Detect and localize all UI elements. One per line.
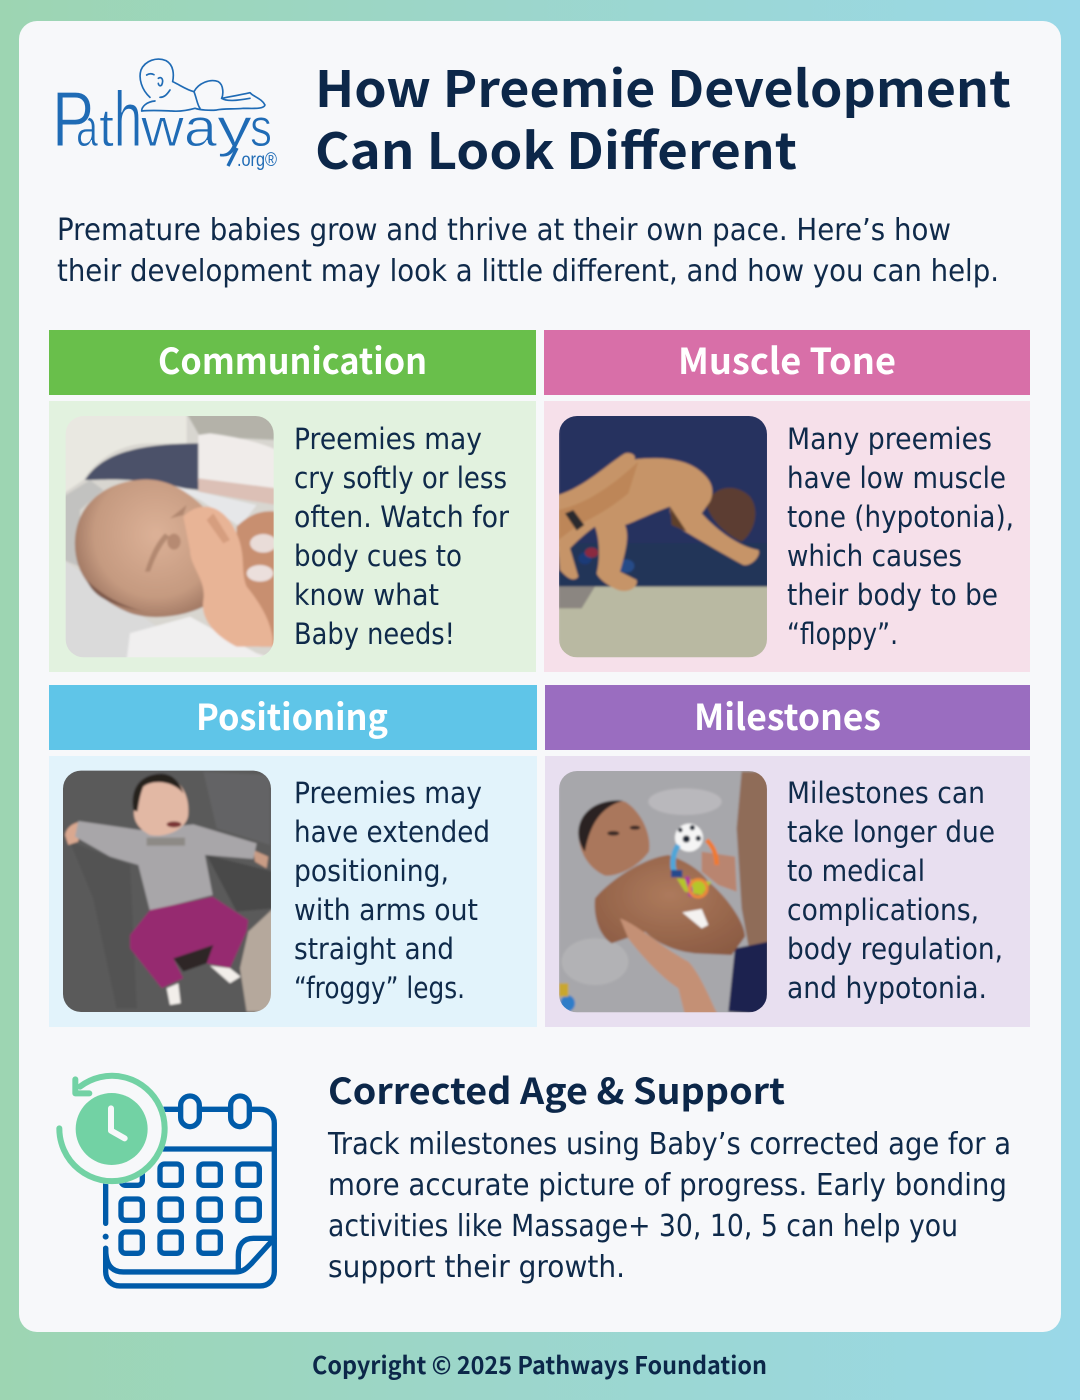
text: muscle tone bbox=[787, 422, 1014, 651]
text: communication: know what bbox=[294, 578, 439, 612]
photo: baby with toy and caregiver bbox=[558, 768, 772, 1015]
icon: calendar bbox=[106, 1096, 274, 1286]
logo: Pathways.org: a bbox=[76, 98, 99, 158]
text: communication: often. Watch for bbox=[294, 500, 509, 534]
text: positioning: with arms out bbox=[294, 893, 478, 927]
text: communication bbox=[294, 422, 509, 651]
icon: clock with return arrow bbox=[56, 1072, 168, 1184]
text: muscle tone: their body to be bbox=[787, 578, 998, 612]
title: How Preemie Development bbox=[315, 50, 1011, 122]
text: milestones: take longer due bbox=[787, 815, 995, 849]
text: communication: Baby needs! bbox=[294, 617, 455, 651]
logo: Pathways.org: wa bbox=[140, 98, 218, 158]
header: milestones: Milestones bbox=[694, 689, 881, 741]
text: muscle tone: which causes bbox=[787, 539, 962, 573]
logo: Pathways.org: .org® bbox=[237, 150, 277, 171]
text: milestones: and hypotonia. bbox=[787, 971, 987, 1005]
text: positioning: straight and bbox=[294, 932, 454, 966]
header: positioning: Positioning bbox=[196, 689, 388, 741]
icon: calendar with clock bbox=[56, 1072, 274, 1286]
header: communication: Communication bbox=[158, 333, 427, 385]
text: corrected age body: activities like Massage+ 30, 10, 5 can help you bbox=[328, 1209, 958, 1244]
text: muscle tone: tone (hypotonia), bbox=[787, 500, 1014, 534]
intro text: Premature babies grow and thrive at their own pace. Here’s how bbox=[57, 213, 951, 248]
logo: Pathways.org: P bbox=[52, 75, 94, 163]
text: corrected age body: more accurate picture of progress. Early bonding bbox=[328, 1168, 1007, 1203]
logo: Pathways.org: t bbox=[99, 98, 114, 158]
logo: Pathways.org: y bbox=[217, 98, 252, 158]
text: corrected age body: Track milestones using Baby’s corrected age for a bbox=[327, 1127, 1011, 1162]
panel: milestones bbox=[545, 685, 1030, 1027]
text: milestones bbox=[787, 776, 1003, 1005]
panel: communication bbox=[49, 330, 536, 672]
header: communication bbox=[49, 330, 536, 395]
text: positioning: Preemies may bbox=[294, 776, 482, 810]
photo: newborn crying bbox=[63, 413, 277, 660]
footer copyright: Copyright © 2025 Pathways Foundation bbox=[312, 1346, 767, 1381]
header: muscle tone: Muscle Tone bbox=[678, 333, 896, 385]
text: muscle tone: have low muscle bbox=[787, 461, 1006, 495]
photo: baby with extended arms and froggy legs bbox=[60, 768, 273, 1015]
text: positioning: “froggy” legs. bbox=[294, 971, 465, 1005]
text: milestones: body regulation, bbox=[787, 932, 1003, 966]
text: muscle tone: “floppy”. bbox=[787, 617, 898, 651]
logo: Pathways.org: s bbox=[250, 98, 272, 158]
intro text bbox=[57, 213, 999, 289]
header: milestones bbox=[545, 685, 1030, 750]
title: Can Look Different bbox=[315, 112, 797, 184]
text: milestones: to medical bbox=[787, 854, 925, 888]
logo: Pathways.org: h bbox=[114, 75, 142, 163]
photo: baby held showing low muscle tone bbox=[558, 413, 772, 660]
text: positioning: have extended bbox=[294, 815, 490, 849]
text: communication: body cues to bbox=[294, 539, 462, 573]
text: positioning bbox=[294, 776, 490, 1005]
title bbox=[315, 50, 1011, 184]
text: milestones: Milestones can bbox=[787, 776, 985, 810]
text: muscle tone: Many preemies bbox=[787, 422, 992, 456]
intro text: their development may look a little different, and how you can help. bbox=[57, 254, 999, 289]
panel: positioning bbox=[49, 685, 537, 1027]
logo: Pathways.org bbox=[52, 59, 277, 171]
text: corrected age body bbox=[327, 1127, 1011, 1285]
text: communication: Preemies may bbox=[294, 422, 482, 456]
panel: muscle tone bbox=[544, 330, 1030, 672]
header: positioning bbox=[49, 685, 537, 750]
text: corrected age body: support their growth. bbox=[328, 1250, 625, 1285]
text: milestones: complications, bbox=[787, 893, 979, 927]
text: positioning: positioning, bbox=[294, 854, 449, 888]
heading: corrected age and support: Corrected Age & Support bbox=[328, 1063, 785, 1115]
header: muscle tone bbox=[544, 330, 1030, 395]
text: communication: cry softly or less bbox=[294, 461, 507, 495]
